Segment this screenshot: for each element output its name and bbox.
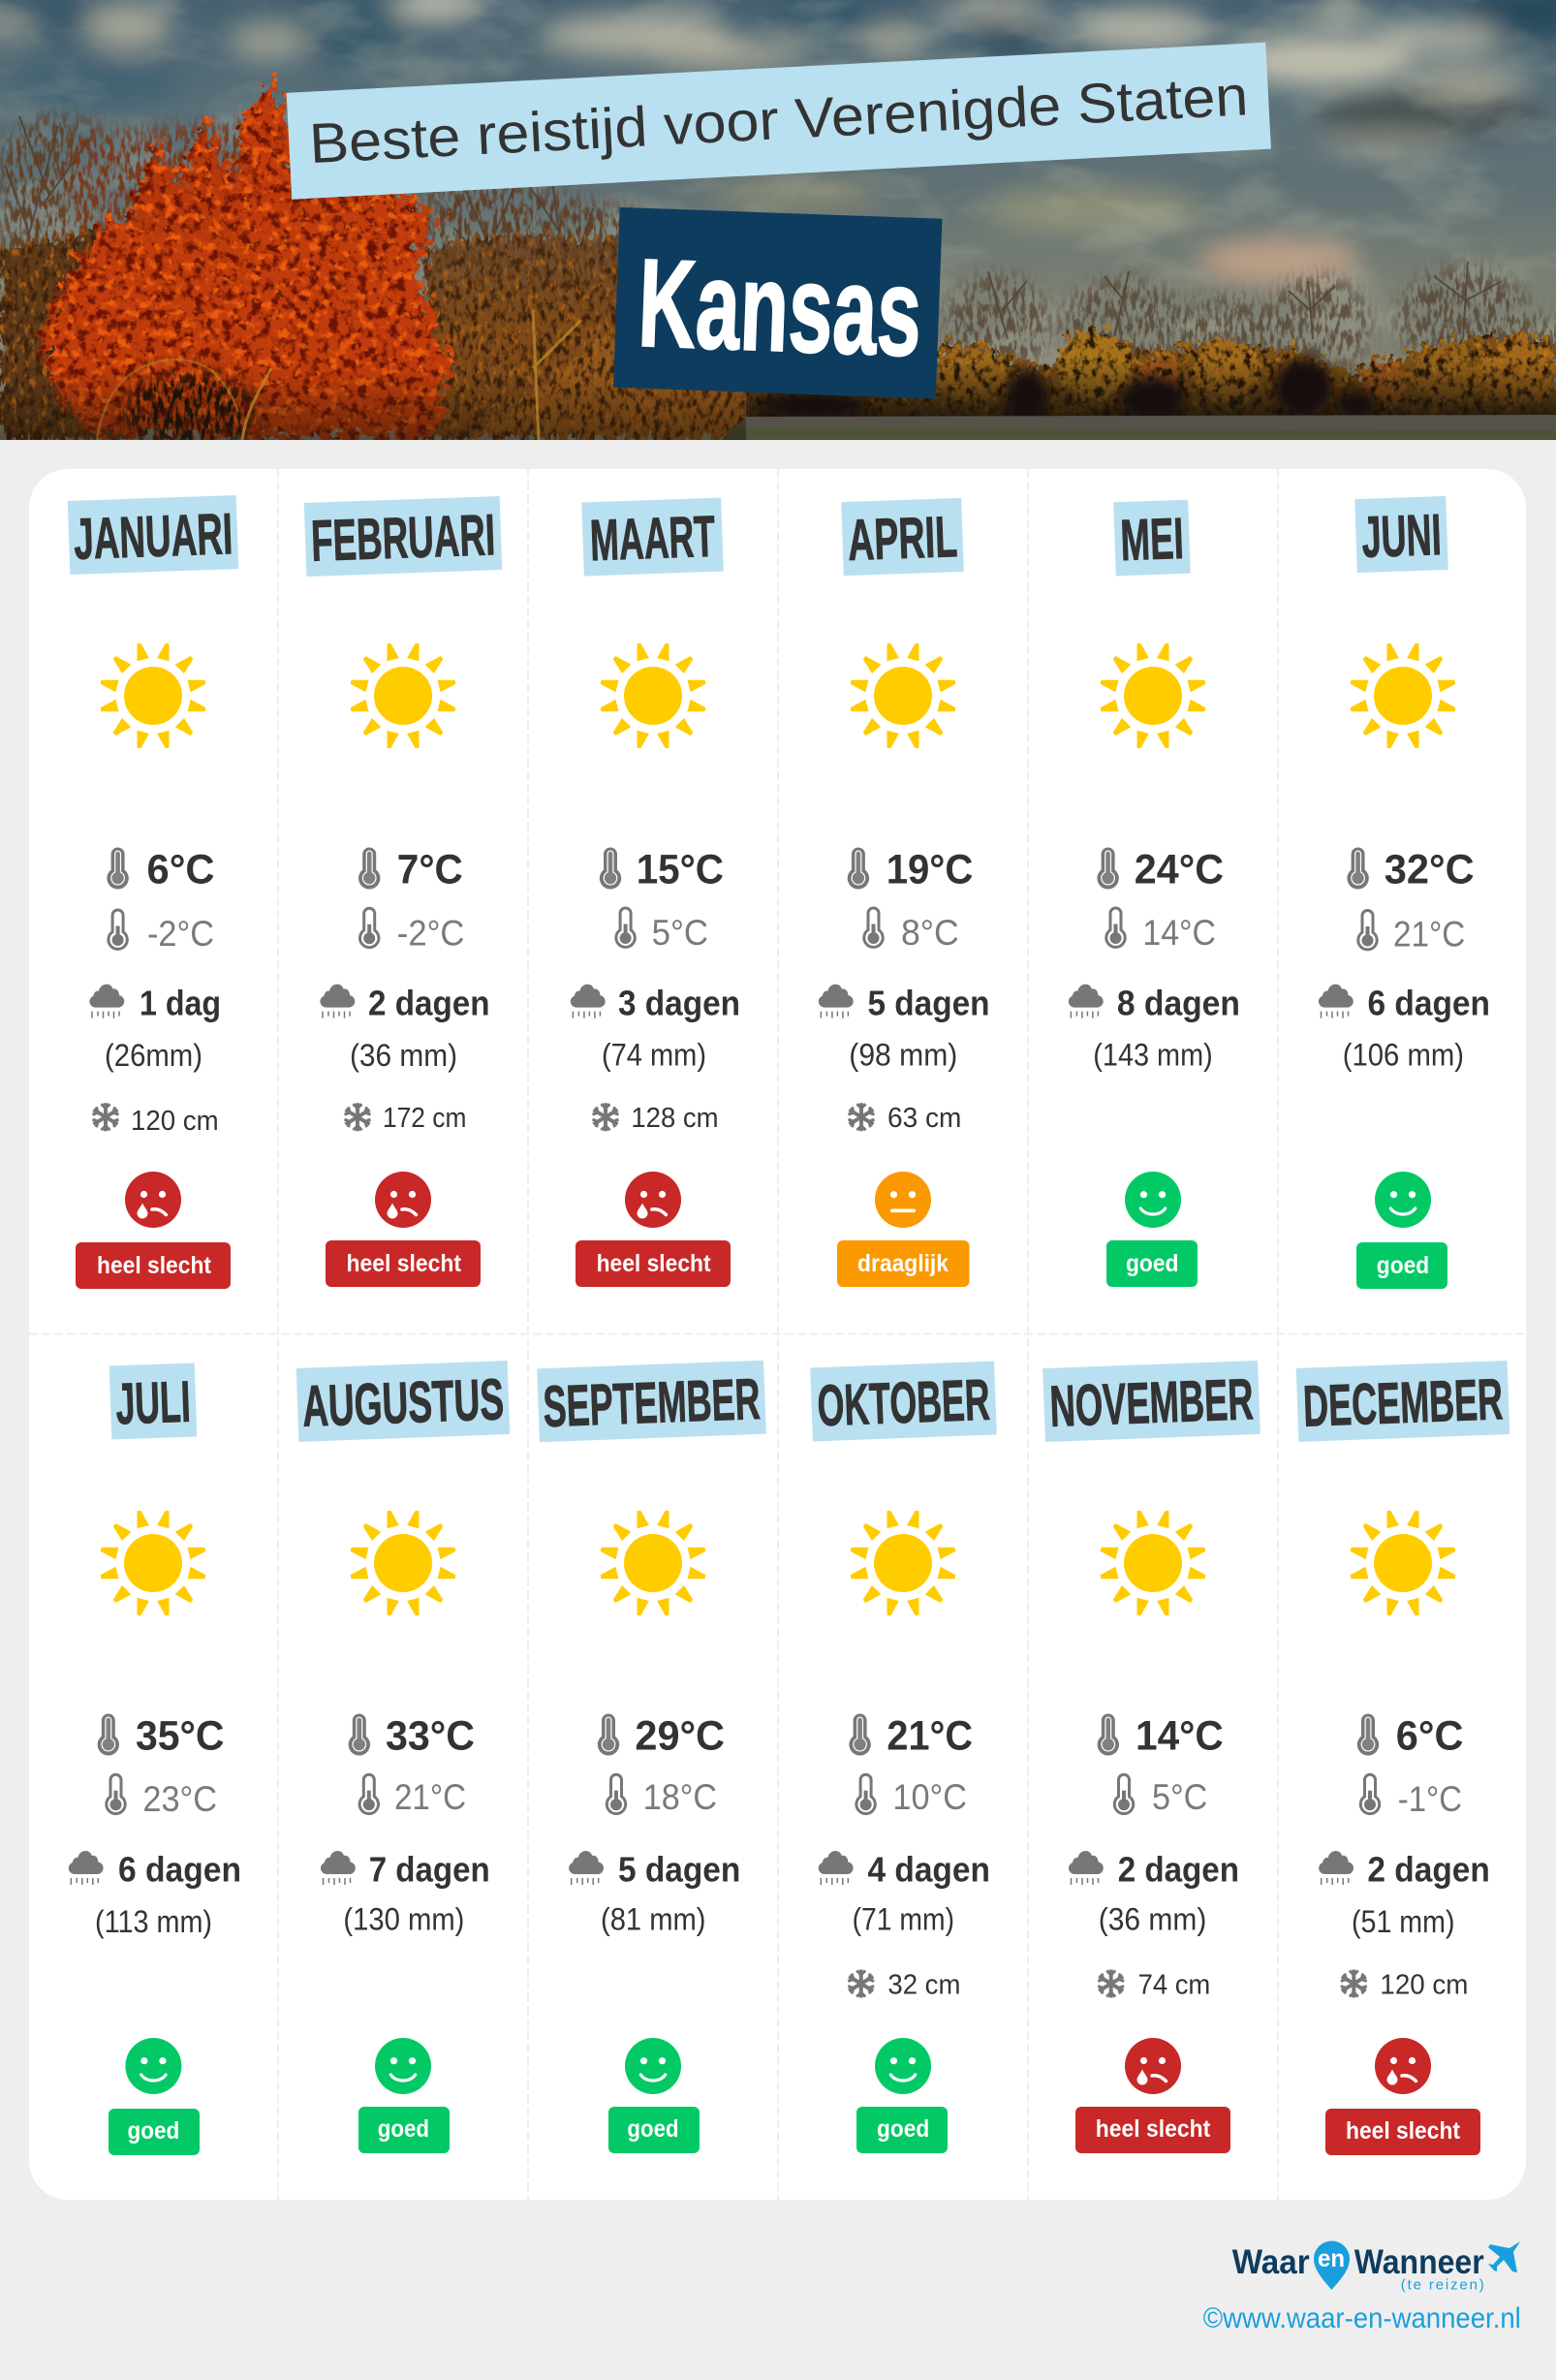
heading: JUNI <box>1360 502 1443 570</box>
icon: thermometer low <box>607 1774 626 1814</box>
icon: happy smiley <box>625 2038 681 2094</box>
icon: thermometer low <box>856 1774 875 1814</box>
icon: rain cloud <box>1319 1851 1354 1885</box>
rain days: 4 dagen <box>868 1850 990 1890</box>
rating badge: goed <box>627 2115 679 2143</box>
panel: juni <box>1319 496 1490 1289</box>
icon: thermometer low <box>616 908 635 947</box>
rating badge <box>608 2107 700 2153</box>
icon: snowflake <box>1098 1969 1124 1998</box>
icon: rain cloud <box>1069 985 1104 1018</box>
heading <box>841 498 964 576</box>
rating badge: goed <box>877 2115 929 2143</box>
logo: Waar en Wanneer <box>1232 2240 1520 2294</box>
min temperature: 8°C <box>901 913 959 953</box>
rainfall: (26mm) <box>105 1038 202 1073</box>
rain days: 5 dagen <box>868 984 990 1023</box>
rain days: 8 dagen <box>1117 984 1240 1023</box>
min temperature: 14°C <box>1142 913 1216 953</box>
rating badge <box>1075 2107 1230 2153</box>
panel: augustus <box>296 1361 510 2153</box>
rating badge: goed <box>128 2117 179 2145</box>
icon: sun <box>351 1511 455 1615</box>
icon: thermometer high <box>849 1713 871 1756</box>
icon: sun <box>601 643 705 748</box>
min temperature: -2°C <box>397 913 464 953</box>
panel: april <box>819 498 990 1287</box>
dark undergrowth <box>121 371 257 453</box>
icon: sun <box>101 1511 205 1615</box>
panel: november <box>1043 1361 1260 2153</box>
icon: snowflake <box>593 1103 618 1131</box>
icon: rain cloud <box>321 1851 356 1885</box>
region name box <box>613 207 942 399</box>
rating badge: goed <box>1377 1252 1429 1279</box>
red-orange maple tree <box>40 81 451 440</box>
icon: happy smiley <box>1375 1172 1431 1228</box>
panel: januari <box>68 495 238 1289</box>
heading <box>296 1361 510 1442</box>
heading: MAART <box>589 504 716 573</box>
max temperature: 6°C <box>1396 1713 1463 1760</box>
panel: maart <box>571 498 740 1287</box>
icon: rain cloud <box>1069 1851 1104 1885</box>
icon: rain cloud <box>569 1851 604 1885</box>
icon: rain cloud <box>819 1851 854 1885</box>
rating badge: goed <box>378 2115 429 2143</box>
icon: thermometer high <box>1098 1713 1119 1756</box>
rating badge <box>326 1240 481 1287</box>
rating badge <box>76 1242 231 1289</box>
icon: rain cloud <box>320 985 355 1018</box>
icon: thermometer high <box>1097 847 1119 890</box>
icon: thermometer high <box>107 847 129 890</box>
icon: thermometer low <box>1360 1774 1380 1814</box>
rating badge <box>1106 1240 1198 1287</box>
icon: thermometer high <box>98 1713 119 1756</box>
icon: sad smiley <box>375 1172 431 1228</box>
icon: snowflake <box>93 1103 118 1131</box>
icon: sad smiley <box>1375 2038 1431 2094</box>
icon: neutral smiley <box>875 1172 931 1228</box>
icon: sun <box>1101 1511 1205 1615</box>
heading: APRIL <box>847 504 958 573</box>
icon: sun <box>101 643 205 748</box>
icon: sun <box>1101 643 1205 748</box>
website credit: ©www.waar-en-wanneer.nl <box>1203 2302 1521 2334</box>
rating badge: heel slecht <box>347 1250 462 1277</box>
rating badge: heel slecht <box>1346 2117 1461 2145</box>
max temperature: 7°C <box>397 847 463 893</box>
rating badge: heel slecht <box>597 1250 711 1277</box>
icon: thermometer high <box>600 847 621 890</box>
title banner <box>287 43 1271 200</box>
icon: thermometer high <box>358 847 380 890</box>
min temperature: 21°C <box>1393 915 1465 955</box>
max temperature: 6°C <box>147 847 215 893</box>
snowfall: 63 cm <box>887 1103 961 1134</box>
panel: juli <box>69 1362 241 2155</box>
rain days: 2 dagen <box>1367 1850 1490 1890</box>
region name: Kansas <box>637 234 924 383</box>
heading <box>109 1362 197 1440</box>
snowfall: 120 cm <box>1380 1969 1468 2000</box>
panel: september <box>537 1361 766 2153</box>
snowfall: 74 cm <box>1138 1969 1210 2000</box>
icon: sad smiley <box>1125 2038 1181 2094</box>
rating badge <box>576 1240 731 1287</box>
icon: thermometer high <box>848 847 869 890</box>
icon: rain cloud <box>89 985 124 1018</box>
max temperature: 19°C <box>887 847 973 893</box>
rain days: 7 dagen <box>369 1850 490 1890</box>
icon: thermometer low <box>864 908 883 947</box>
rain days: 6 dagen <box>118 1850 241 1890</box>
logo: Waar en Wanneer: (te reizen) <box>1401 2277 1484 2294</box>
heading <box>810 1362 997 1441</box>
rainfall: (36 mm) <box>1099 1902 1206 1937</box>
heading <box>537 1361 766 1442</box>
max temperature: 35°C <box>136 1713 225 1760</box>
panel: februari <box>304 496 502 1287</box>
icon: thermometer low <box>360 908 379 948</box>
rainfall: (98 mm) <box>849 1037 957 1072</box>
sparse brown tree canopy, left and middle <box>0 116 639 349</box>
panel: december <box>1296 1361 1509 2155</box>
heading <box>68 495 238 575</box>
min temperature: 5°C <box>652 913 708 953</box>
icon: sun <box>1351 643 1455 748</box>
rating badge <box>1325 2109 1480 2155</box>
max temperature: 33°C <box>386 1713 475 1760</box>
white card with all months <box>29 469 1526 2200</box>
icon: sun <box>1351 1511 1455 1615</box>
rainfall: (130 mm) <box>343 1902 464 1937</box>
rating badge: heel slecht <box>97 1252 212 1279</box>
max temperature: 15°C <box>637 847 724 893</box>
rain days: 2 dagen <box>368 984 490 1023</box>
logo: Waar en Wanneer: Waar <box>1232 2243 1310 2281</box>
icon: thermometer low <box>107 1774 125 1814</box>
heading: JANUARI <box>73 501 233 572</box>
dark conifer trunks in tree line <box>761 359 1376 424</box>
icon: snowflake <box>1341 1969 1367 1998</box>
min temperature: -2°C <box>147 914 214 954</box>
rainfall: (74 mm) <box>602 1037 706 1072</box>
rainfall: (36 mm) <box>350 1038 457 1073</box>
bare branches in the sky <box>5 116 1502 440</box>
icon: happy smiley <box>375 2038 431 2094</box>
icon: map pin: en <box>1318 2245 1345 2272</box>
snowfall: 172 cm <box>383 1103 466 1134</box>
icon: happy smiley <box>875 2038 931 2094</box>
rain days: 1 dag <box>140 984 221 1023</box>
heading <box>1043 1361 1260 1442</box>
heading <box>1113 500 1191 576</box>
icon: rain cloud <box>1319 985 1354 1018</box>
rainfall: (113 mm) <box>95 1904 212 1939</box>
rating badge <box>109 2109 200 2155</box>
max temperature: 14°C <box>1136 1713 1224 1760</box>
heading: OKTOBER <box>816 1367 991 1438</box>
heading: JULI <box>114 1369 192 1436</box>
right tree line continuous foliage <box>746 329 1556 426</box>
min temperature: 5°C <box>1152 1777 1207 1817</box>
icon: snowflake <box>849 1103 874 1131</box>
bare tops of right tree line <box>945 266 1556 382</box>
icon: thermometer low <box>1106 908 1125 947</box>
heading: AUGUSTUS <box>301 1366 505 1439</box>
rainfall: (143 mm) <box>1093 1037 1213 1072</box>
rain days: 5 dagen <box>618 1850 740 1890</box>
icon: thermometer low <box>1358 911 1377 950</box>
rating badge: goed <box>1126 1250 1178 1277</box>
heading: SEPTEMBER <box>542 1366 762 1439</box>
icon: sun <box>601 1511 705 1615</box>
heading: FEBRUARI <box>310 502 496 574</box>
icon: snowflake <box>848 1969 874 1998</box>
rain days: 2 dagen <box>1118 1850 1239 1890</box>
icon: thermometer high <box>349 1713 370 1756</box>
max temperature: 32°C <box>1385 847 1475 893</box>
icon: happy smiley <box>125 2038 181 2094</box>
rating badge: draaglijk <box>857 1250 949 1277</box>
snowfall: 32 cm <box>887 1969 960 2000</box>
icon: thermometer low <box>1114 1774 1134 1814</box>
icon: rain cloud <box>819 985 854 1018</box>
icon: happy smiley <box>1125 1172 1181 1228</box>
icon: thermometer high <box>1347 847 1369 890</box>
icon: thermometer high <box>1357 1713 1379 1756</box>
icon: sad smiley <box>125 1172 181 1228</box>
icon: thermometer low <box>109 910 127 949</box>
icon: rain cloud <box>571 985 606 1018</box>
riverbank and grass strip <box>722 415 1556 440</box>
title text: Beste reistijd voor Verenigde Staten <box>308 64 1250 175</box>
icon: thermometer low <box>359 1774 378 1814</box>
min temperature: 18°C <box>643 1777 717 1817</box>
rainfall: (106 mm) <box>1343 1037 1464 1072</box>
max temperature: 29°C <box>635 1713 725 1760</box>
min temperature: 23°C <box>142 1779 217 1819</box>
heading: NOVEMBER <box>1048 1366 1255 1439</box>
icon: sun <box>851 643 955 748</box>
icon: airplane <box>1488 2241 1520 2272</box>
rain days: 6 dagen <box>1368 984 1490 1023</box>
panel: oktober <box>810 1362 997 2153</box>
icon: thermometer high <box>598 1713 619 1756</box>
icon: sun <box>851 1511 955 1615</box>
hero photo: autumn trees under cloudy sky <box>0 0 1556 453</box>
heading <box>304 496 502 577</box>
rainfall: (81 mm) <box>601 1902 705 1937</box>
icon: sun <box>351 643 455 748</box>
rating badge <box>1356 1242 1447 1289</box>
icon: map pin <box>1314 2240 1350 2290</box>
heading <box>581 498 724 576</box>
rating badge: heel slecht <box>1096 2115 1211 2143</box>
min temperature: -1°C <box>1398 1779 1462 1819</box>
icon: sad smiley <box>625 1172 681 1228</box>
rainfall: (71 mm) <box>853 1902 954 1937</box>
heading <box>1354 496 1448 573</box>
rainfall: (51 mm) <box>1352 1904 1455 1939</box>
min temperature: 10°C <box>892 1777 967 1817</box>
snowfall: 120 cm <box>131 1106 219 1137</box>
rating badge <box>358 2107 450 2153</box>
logo: Waar en Wanneer: Wanneer <box>1354 2243 1484 2281</box>
panel: mei <box>1069 500 1240 1287</box>
rain days: 3 dagen <box>618 984 740 1023</box>
icon: rain cloud <box>69 1851 104 1885</box>
max temperature: 21°C <box>887 1713 973 1760</box>
icon: snowflake <box>345 1103 370 1131</box>
min temperature: 21°C <box>394 1777 466 1817</box>
max temperature: 24°C <box>1135 847 1224 893</box>
rating badge <box>837 1240 969 1287</box>
heading: MEI <box>1119 506 1185 573</box>
snowfall: 128 cm <box>631 1103 719 1134</box>
rating badge <box>856 2107 948 2153</box>
